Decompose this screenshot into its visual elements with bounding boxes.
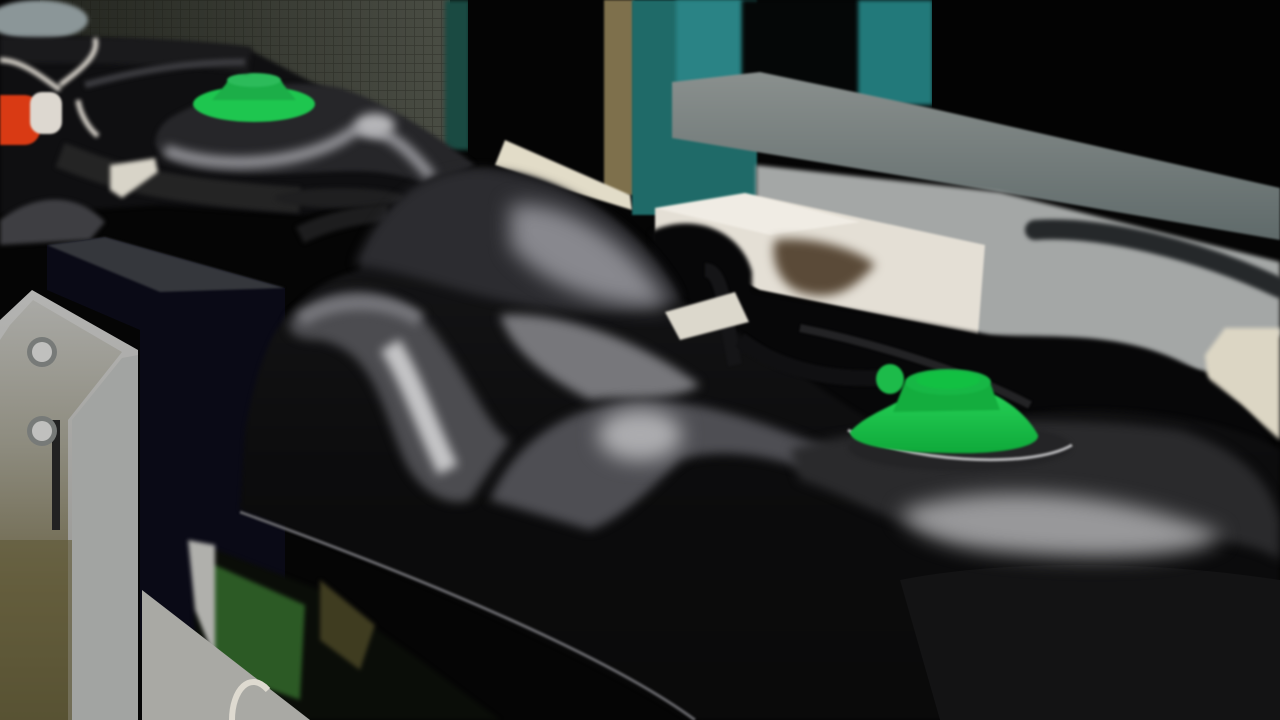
small white label	[665, 292, 749, 340]
grey ledge	[672, 72, 1280, 240]
metal bracket	[0, 290, 138, 720]
green reflection panel	[188, 540, 500, 720]
lower-right tank panel	[900, 565, 1280, 720]
tank shoulder and highlights	[289, 169, 1280, 560]
icon: bolts	[27, 337, 57, 446]
light wall panel	[756, 165, 1280, 372]
white block at right edge	[1205, 328, 1280, 440]
dark cover behind front cap	[650, 223, 1280, 720]
dark square block	[47, 237, 285, 640]
dark hose on wall	[1035, 229, 1280, 288]
white foam block	[655, 193, 985, 335]
icon: red plug	[0, 92, 62, 145]
top-left cables and red cap	[0, 0, 405, 245]
lower dark rail with bright edge	[240, 512, 695, 720]
lower metal plate	[142, 590, 310, 720]
icon: front green cap	[848, 364, 1072, 471]
main black tank body	[240, 168, 1280, 720]
white tag, upper	[495, 140, 632, 210]
second tank, upper left	[0, 30, 475, 215]
hoses from front cap	[705, 270, 1030, 405]
icon: rear green cap	[193, 73, 315, 122]
